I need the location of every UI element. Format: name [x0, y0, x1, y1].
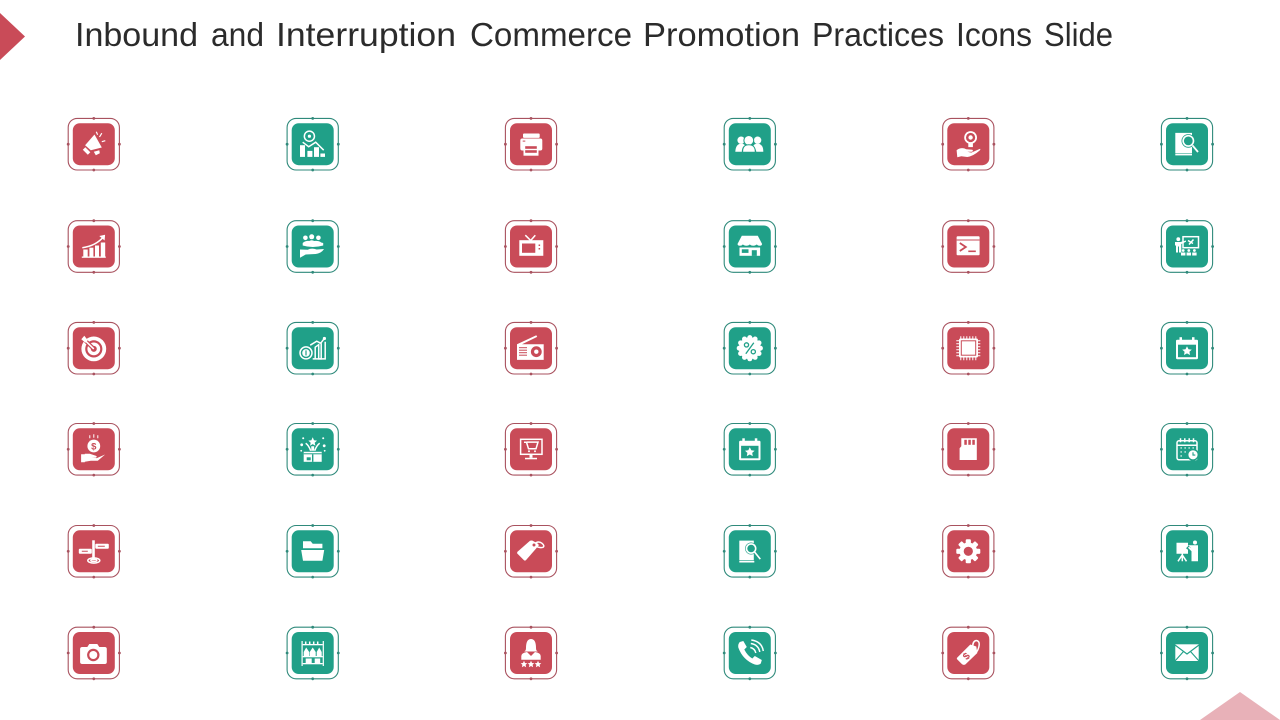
icon: coin over hand: $: [91, 441, 97, 452]
icon: label tag: [517, 540, 544, 561]
icon: signpost: [79, 540, 109, 563]
tile: gift with fireworks: [286, 422, 340, 476]
tile: star calendar: [723, 422, 777, 476]
tile: printer: [504, 117, 558, 171]
tile: teacher with audience: [1160, 219, 1214, 274]
title: Icons: [956, 16, 1032, 53]
icon: dollar chart falling: [300, 130, 325, 157]
tile: signpost: [67, 524, 121, 578]
icon: envelope: [1175, 644, 1199, 661]
title: Practices: [812, 16, 944, 53]
tile: price tag: [941, 626, 995, 680]
title: and: [211, 16, 264, 53]
icon: price tag: $: [961, 651, 973, 663]
icon: printer: [520, 134, 542, 156]
tile: people on hand: [286, 219, 340, 274]
icon: star calendar: [739, 438, 760, 460]
tile: dollar chart falling: [286, 117, 340, 171]
icon: storefront: [738, 236, 762, 256]
tile: book search: [1160, 117, 1214, 171]
icon: calendar with clock: [1177, 438, 1199, 461]
icon: folder: [301, 541, 324, 561]
icon: presenter at board: [1176, 540, 1198, 561]
icon: settings gear: [956, 539, 980, 563]
icon: camera: [80, 644, 107, 664]
icon: book search: [1175, 133, 1198, 155]
tile: presenter at board: [1160, 524, 1214, 578]
tile: phone call: [723, 626, 777, 680]
tile: television: [504, 219, 558, 274]
corner triangle: bottom right: [1200, 692, 1280, 720]
tile: radio: [504, 321, 558, 375]
title: Interruption: [276, 16, 456, 53]
tile: settings gear: [941, 524, 995, 578]
tile: discount badge: [723, 321, 777, 375]
icon: star calendar: [1176, 337, 1198, 359]
icon: growth chart: [82, 235, 106, 258]
icon: gift with fireworks: [300, 437, 326, 462]
icon: microchip: [956, 336, 980, 360]
tile: label tag: [504, 524, 558, 578]
tile: star calendar: [1160, 321, 1214, 375]
tile: book search: [723, 524, 777, 578]
title: Promotion: [643, 16, 800, 53]
icon: online shopping monitor: [521, 439, 542, 459]
tile: storefront: [723, 219, 777, 274]
icon: people on hand: [300, 234, 324, 258]
title: [75, 16, 1113, 53]
tile: target with dart: [67, 321, 121, 375]
corner arrow: top left: [0, 13, 25, 60]
title: Slide: [1044, 16, 1113, 53]
tile: microchip: [941, 321, 995, 375]
tile: money growth chart: [286, 321, 340, 375]
tile: megaphone: [67, 117, 121, 171]
icon: teacher with audience: [1175, 237, 1198, 256]
tile: folder: [286, 524, 340, 578]
tile: online shopping monitor: [504, 422, 558, 476]
tile: camera: [67, 626, 121, 680]
title: Commerce: [470, 16, 632, 53]
icon: book search: [739, 541, 760, 562]
icon: megaphone: [83, 132, 105, 155]
icon: phone call: [738, 640, 763, 665]
tile: coin over hand: [67, 422, 121, 476]
icon: terminal window: [957, 236, 980, 255]
icon: discount badge: [737, 335, 763, 361]
tile: people: [723, 117, 777, 171]
icon: radio: [517, 335, 544, 360]
tile: idea bulb in hand: [941, 117, 995, 171]
icon: store shelf: [302, 641, 324, 666]
icon: memory card: [960, 438, 977, 460]
tile: terminal window: [941, 219, 995, 274]
icon: rated woman employee: [521, 639, 541, 667]
tile: envelope: [1160, 626, 1214, 680]
tile: store shelf: [286, 626, 340, 680]
icon: television: [519, 235, 543, 256]
tile: growth chart: [67, 219, 121, 274]
tile: memory card: [941, 422, 995, 476]
icon: money growth chart: [300, 337, 326, 359]
tile: calendar with clock: [1160, 422, 1214, 476]
icon: target with dart: [81, 336, 106, 361]
icon: people: [735, 135, 763, 152]
title: Inbound: [75, 16, 198, 53]
tile: rated woman employee: [504, 626, 558, 680]
icon: idea bulb in hand: [957, 131, 980, 157]
